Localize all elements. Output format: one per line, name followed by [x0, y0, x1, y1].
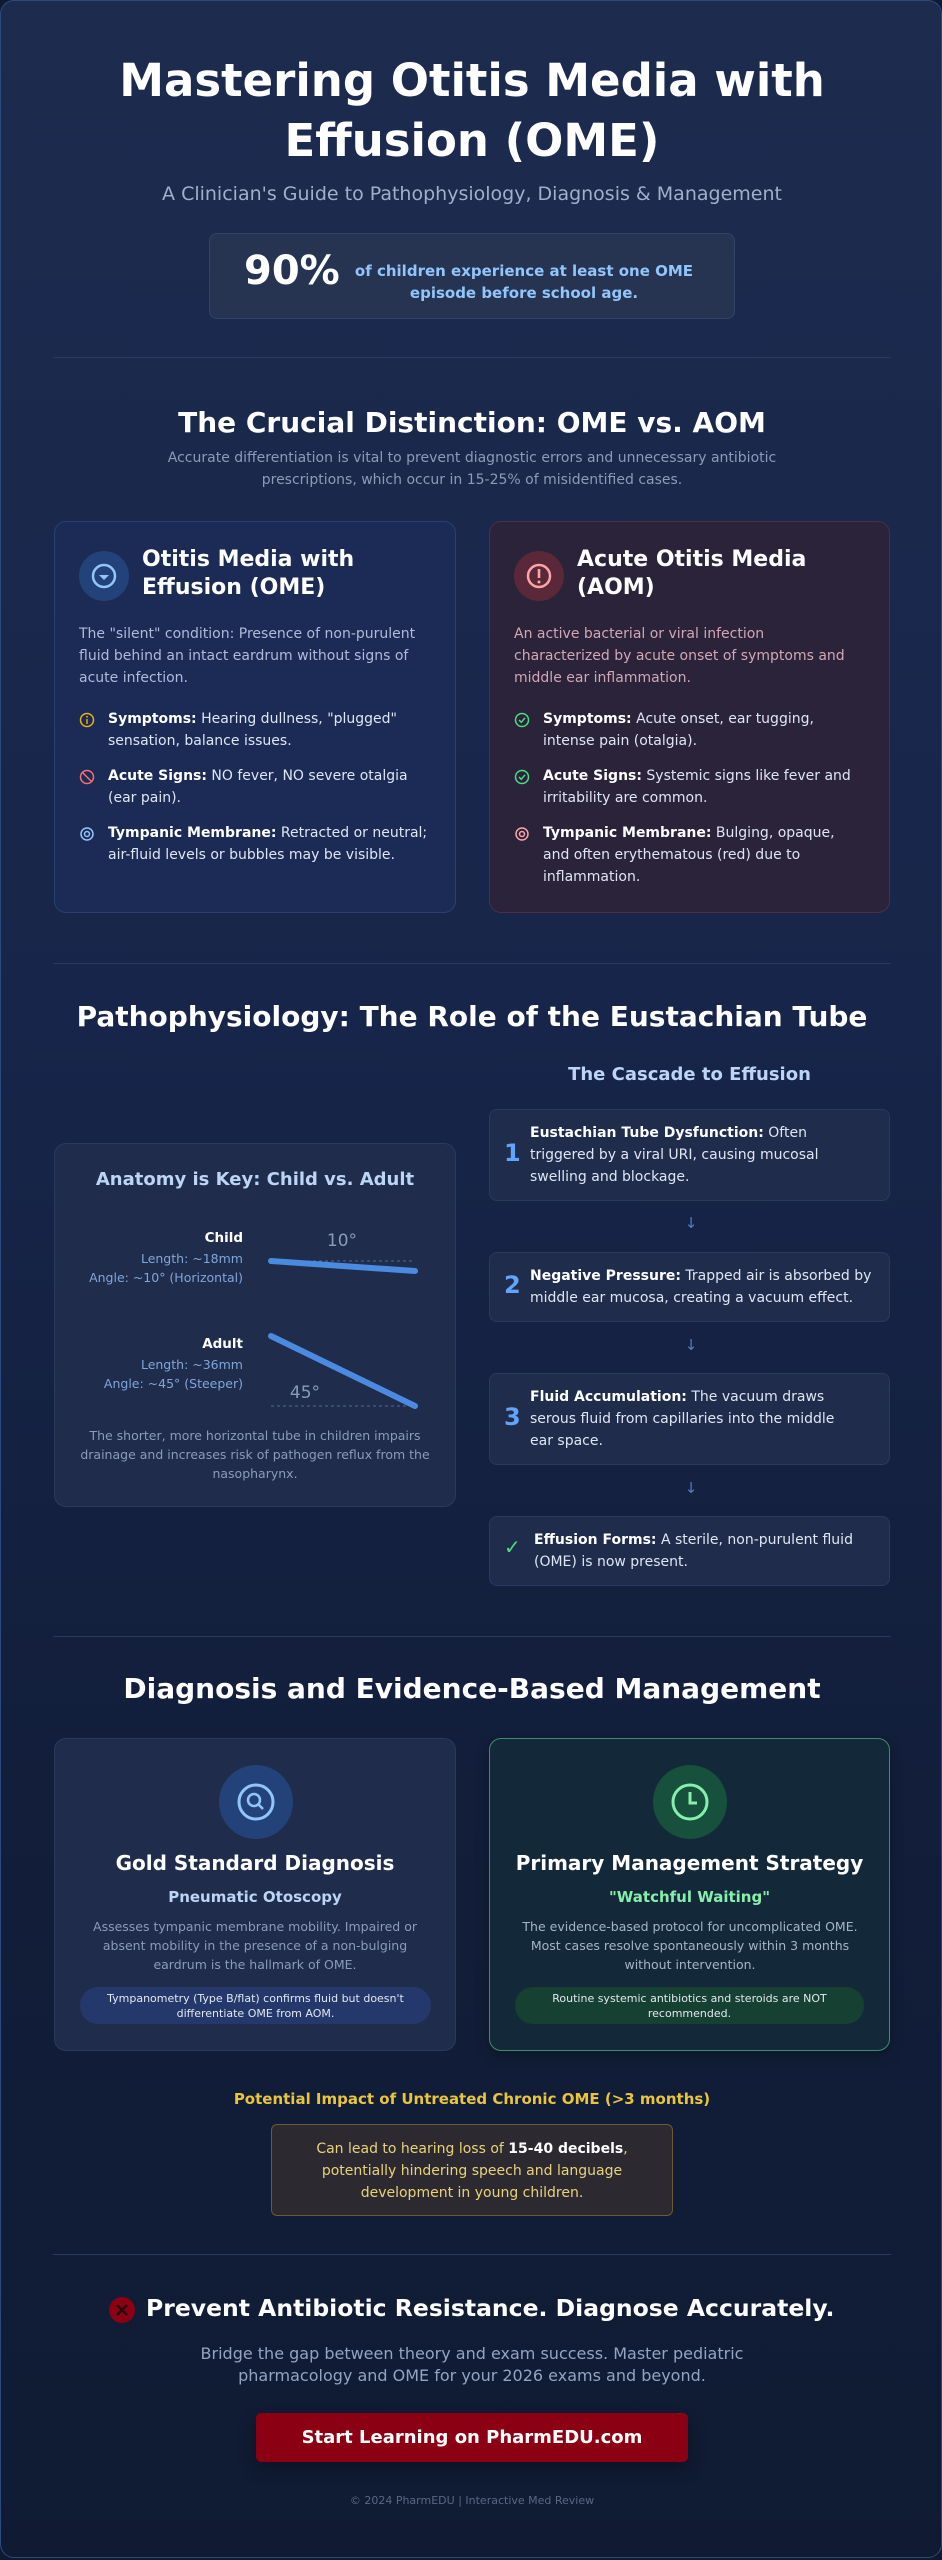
arrow 3: ↓ [685, 1479, 697, 1497]
button: CTA [256, 2413, 688, 2462]
icon: alert AOM [514, 551, 564, 601]
icon: ear OME [79, 551, 129, 601]
diagnosis note pill: differentiate OME from AOM. [177, 2007, 334, 2020]
adult labels: Angle: ~45° (Steeper) [104, 1376, 243, 1391]
management heading: Primary Management Strategy [516, 1851, 863, 1875]
closing text: pharmacology and OME for your 2026 exams and beyond. [238, 2366, 706, 2385]
step 4: ✓ [504, 1535, 521, 1559]
step 1 [489, 1109, 890, 1201]
heading: cascade: The Cascade to Effusion [568, 1064, 811, 1085]
diagram: tube angles: 10° [327, 1231, 357, 1251]
step 3: Fluid Accumulation: The vacuum draws serous fluid from capillaries into the middle ear space. [530, 1389, 834, 1449]
AOM list: Tympanic Membrane: Bulging, opaque, and often erythematous (red) due to inflammation. [543, 825, 835, 885]
diagnosis text: Assesses tympanic membrane mobility. Impaired or absent mobility in the presence of a non-bulging eardrum is the hallmark of OME. [93, 1919, 417, 1972]
AOM heading: (AOM) [577, 575, 655, 600]
OME list: Symptoms: Hearing dullness, "plugged" sensation, balance issues. [108, 711, 397, 749]
child labels [89, 1230, 243, 1285]
panel: anatomy [54, 1143, 456, 1507]
panel: AOM [489, 521, 890, 913]
diagnosis subheading: Pneumatic Otoscopy [168, 1888, 342, 1906]
OME description: The "silent" condition: Presence of non-purulent fluid behind an intact eardrum without signs of acute infection. [79, 626, 415, 686]
step 3 [489, 1373, 890, 1465]
section intro text: Accurate differentiation is vital to prevent diagnostic errors and unnecessary antibiotic prescriptions, which occur in 15-25% of misidentified cases. [168, 450, 776, 488]
step 1: 1 [504, 1139, 521, 1167]
closing text: Bridge the gap between theory and exam success. Master pediatric [201, 2344, 743, 2363]
heading: pathophysiology: Pathophysiology: The Role of the Eustachian Tube [77, 1000, 867, 1033]
AOM list: Symptoms: Acute onset, ear tugging, intense pain (otalgia). [543, 711, 814, 749]
callout: hearing loss: potentially hindering speech and language [322, 2163, 622, 2179]
title [119, 54, 825, 167]
diagram: tube angles: 45° [290, 1383, 320, 1403]
subtitle: A Clinician's Guide to Pathophysiology, Diagnosis & Management [162, 183, 782, 205]
child labels: Length: ~18mm [141, 1250, 243, 1266]
icon: clock [653, 1765, 727, 1839]
heading: crucial distinction: The Crucial Distinction: OME vs. AOM [178, 406, 766, 439]
title: Mastering Otitis Media with [119, 54, 825, 107]
callout: hearing loss: development in young children. [361, 2185, 583, 2201]
diagram: tube angles [268, 1231, 418, 1409]
diagnosis note pill: Tympanometry (Type B/flat) confirms fluid but doesn't [107, 1992, 404, 2005]
OME list: Tympanic Membrane: Retracted or neutral; air-fluid levels or bubbles may be visible. [108, 825, 427, 863]
title: Effusion (OME) [285, 114, 659, 167]
management text: The evidence-based protocol for uncomplicated OME. Most cases resolve spontaneously within 3 months without intervention. [522, 1919, 858, 1972]
child labels: Child [205, 1230, 243, 1246]
step 3: 3 [504, 1403, 521, 1431]
button: CTA: Start Learning on PharmEDU.com [302, 2427, 642, 2448]
panel: diagnosis [54, 1738, 456, 2051]
OME heading [142, 547, 354, 600]
adult labels: Adult [202, 1336, 243, 1352]
panel: OME [54, 521, 456, 913]
anatomy heading: Anatomy is Key: Child vs. Adult [96, 1169, 414, 1190]
diagnosis heading: Gold Standard Diagnosis [116, 1851, 394, 1875]
anatomy caption: The shorter, more horizontal tube in children impairs drainage and increases risk of pathogen reflux from the nasopharynx. [80, 1428, 430, 1481]
step 2 [489, 1252, 890, 1322]
adult labels [104, 1336, 243, 1391]
OME heading: Otitis Media with [142, 547, 354, 572]
closing heading with icon: Prevent Antibiotic Resistance. Diagnose Accurately. [146, 2294, 834, 2322]
management note pill: Routine systemic antibiotics and steroids are NOT [552, 1992, 827, 2005]
arrow 2: ↓ [685, 1336, 697, 1354]
step 2: 2 [504, 1271, 521, 1299]
OME heading: Effusion (OME) [142, 575, 325, 600]
icon: red x [109, 2297, 135, 2323]
stat box: 90%: 90% [244, 248, 340, 294]
panel: management [489, 1738, 890, 2051]
OME list [80, 711, 427, 863]
footer: © 2024 PharmEDU | Interactive Med Review [350, 2494, 594, 2507]
adult labels: Length: ~36mm [141, 1356, 243, 1372]
heading: impact: Potential Impact of Untreated Chronic OME (>3 months) [234, 2090, 710, 2108]
management subheading: "Watchful Waiting" [609, 1888, 770, 1906]
management note pill [515, 1987, 864, 2024]
AOM description: An active bacterial or viral infection characterized by acute onset of symptoms and middle ear inflammation. [514, 626, 845, 686]
heading: diagnosis: Diagnosis and Evidence-Based Management [123, 1672, 821, 1705]
callout: hearing loss [271, 2124, 673, 2216]
OME list: Acute Signs: NO fever, NO severe otalgia (ear pain). [108, 768, 408, 806]
AOM heading: Acute Otitis Media [577, 547, 806, 572]
closing text [201, 2344, 743, 2385]
callout: hearing loss: Can lead to hearing loss of 15-40 decibels, [316, 2141, 628, 2157]
stat box: 90%: of children experience at least one OME episode before school age. [355, 262, 693, 302]
stat box: 90% [209, 233, 735, 319]
arrow 1: ↓ [685, 1214, 697, 1232]
step 1: Eustachian Tube Dysfunction: Often triggered by a viral URI, causing mucosal swelling and blockage. [530, 1125, 819, 1185]
step 4: Effusion Forms: A sterile, non-purulent fluid (OME) is now present. [534, 1532, 853, 1570]
child labels: Angle: ~10° (Horizontal) [89, 1270, 243, 1285]
AOM list [514, 711, 851, 885]
icon: otoscope [219, 1765, 293, 1839]
step 4 [489, 1516, 890, 1586]
management note pill: recommended. [648, 2007, 731, 2020]
AOM list: Acute Signs: Systemic signs like fever and irritability are common. [543, 768, 851, 806]
AOM heading [577, 547, 806, 600]
step 2: Negative Pressure: Trapped air is absorbed by middle ear mucosa, creating a vacuum effect. [530, 1268, 871, 1306]
diagnosis note pill [80, 1987, 431, 2024]
